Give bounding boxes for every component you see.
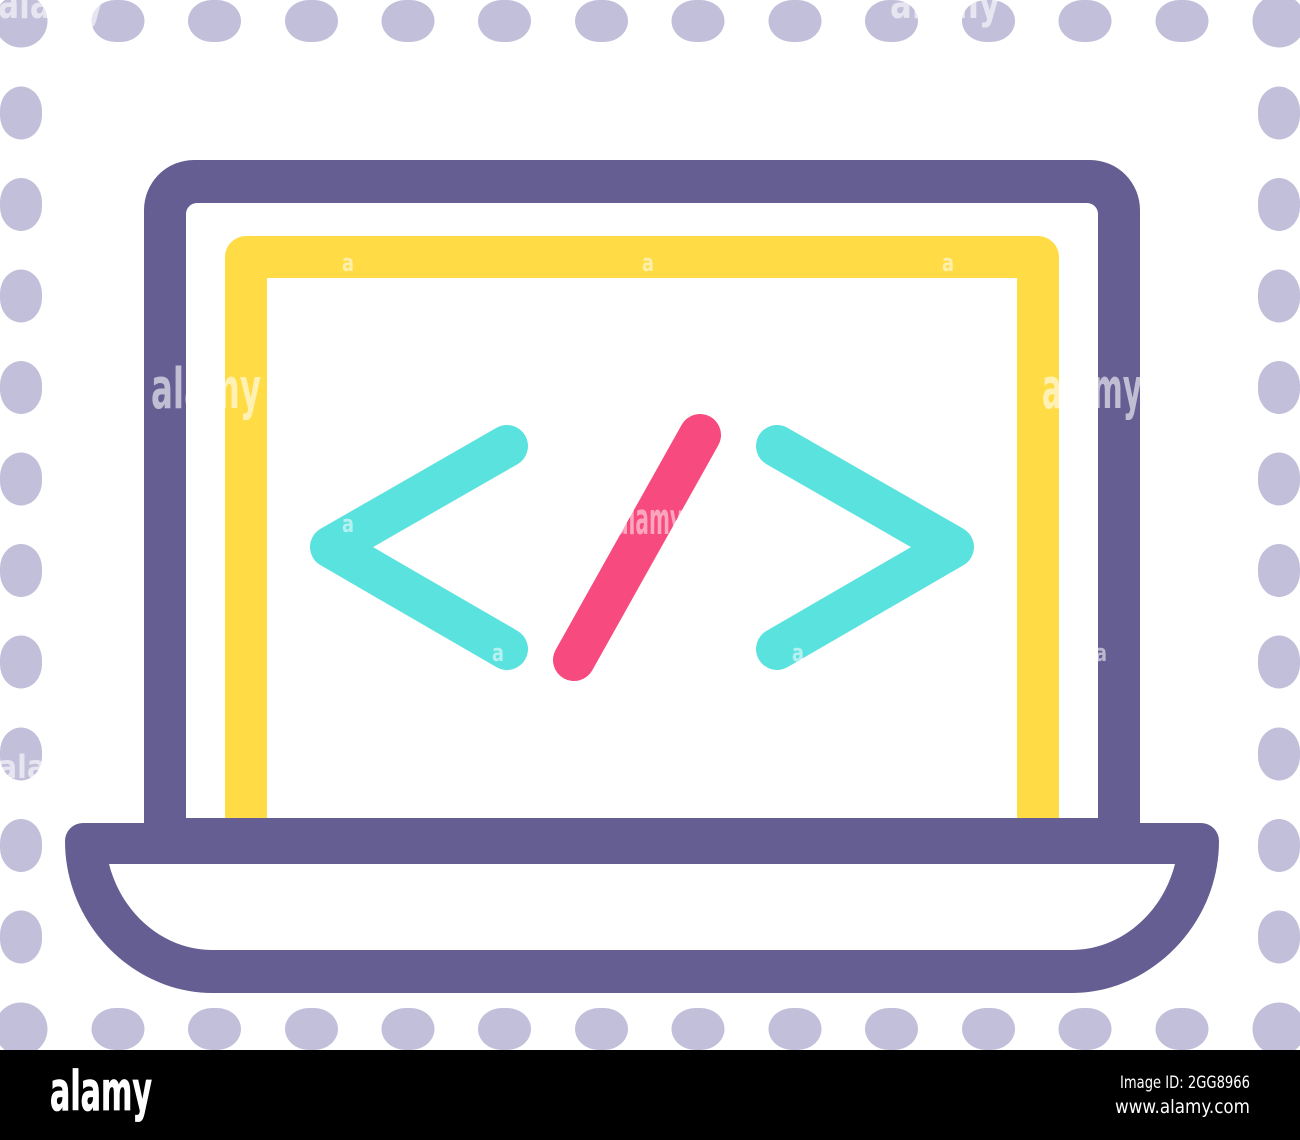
image id: Image ID: 2GG8966 [1120,1073,1250,1093]
small watermark letters: a [342,510,354,538]
footer logo: alamy [50,1060,152,1123]
small watermark letters: a [642,249,654,277]
watermark overlays [0,0,1142,786]
small watermark letters: a [492,639,504,667]
code slash [574,435,700,660]
black footer bar [0,1050,1300,1140]
small watermark letters: a [792,639,804,667]
small watermark letters: a [342,249,354,277]
watermark overlays: alamy [615,494,683,545]
right code chevron [777,446,953,649]
small watermark letters: a [942,249,954,277]
website url: www.alamy.com [1115,1096,1250,1118]
left code chevron [331,446,507,649]
yellow inner screen frame [246,257,1038,825]
laptop base [65,818,1219,993]
small watermark letters: a [1095,639,1107,667]
watermark: right: alamy [1042,357,1142,422]
laptop lid outline [144,160,1140,830]
watermark: left: alamy [151,357,261,422]
left column of dots [0,86,42,964]
right column of dots [1258,86,1300,964]
small watermark letters [342,249,1107,667]
top row of dots [92,0,1208,42]
bottom row of dots [92,1008,1208,1050]
